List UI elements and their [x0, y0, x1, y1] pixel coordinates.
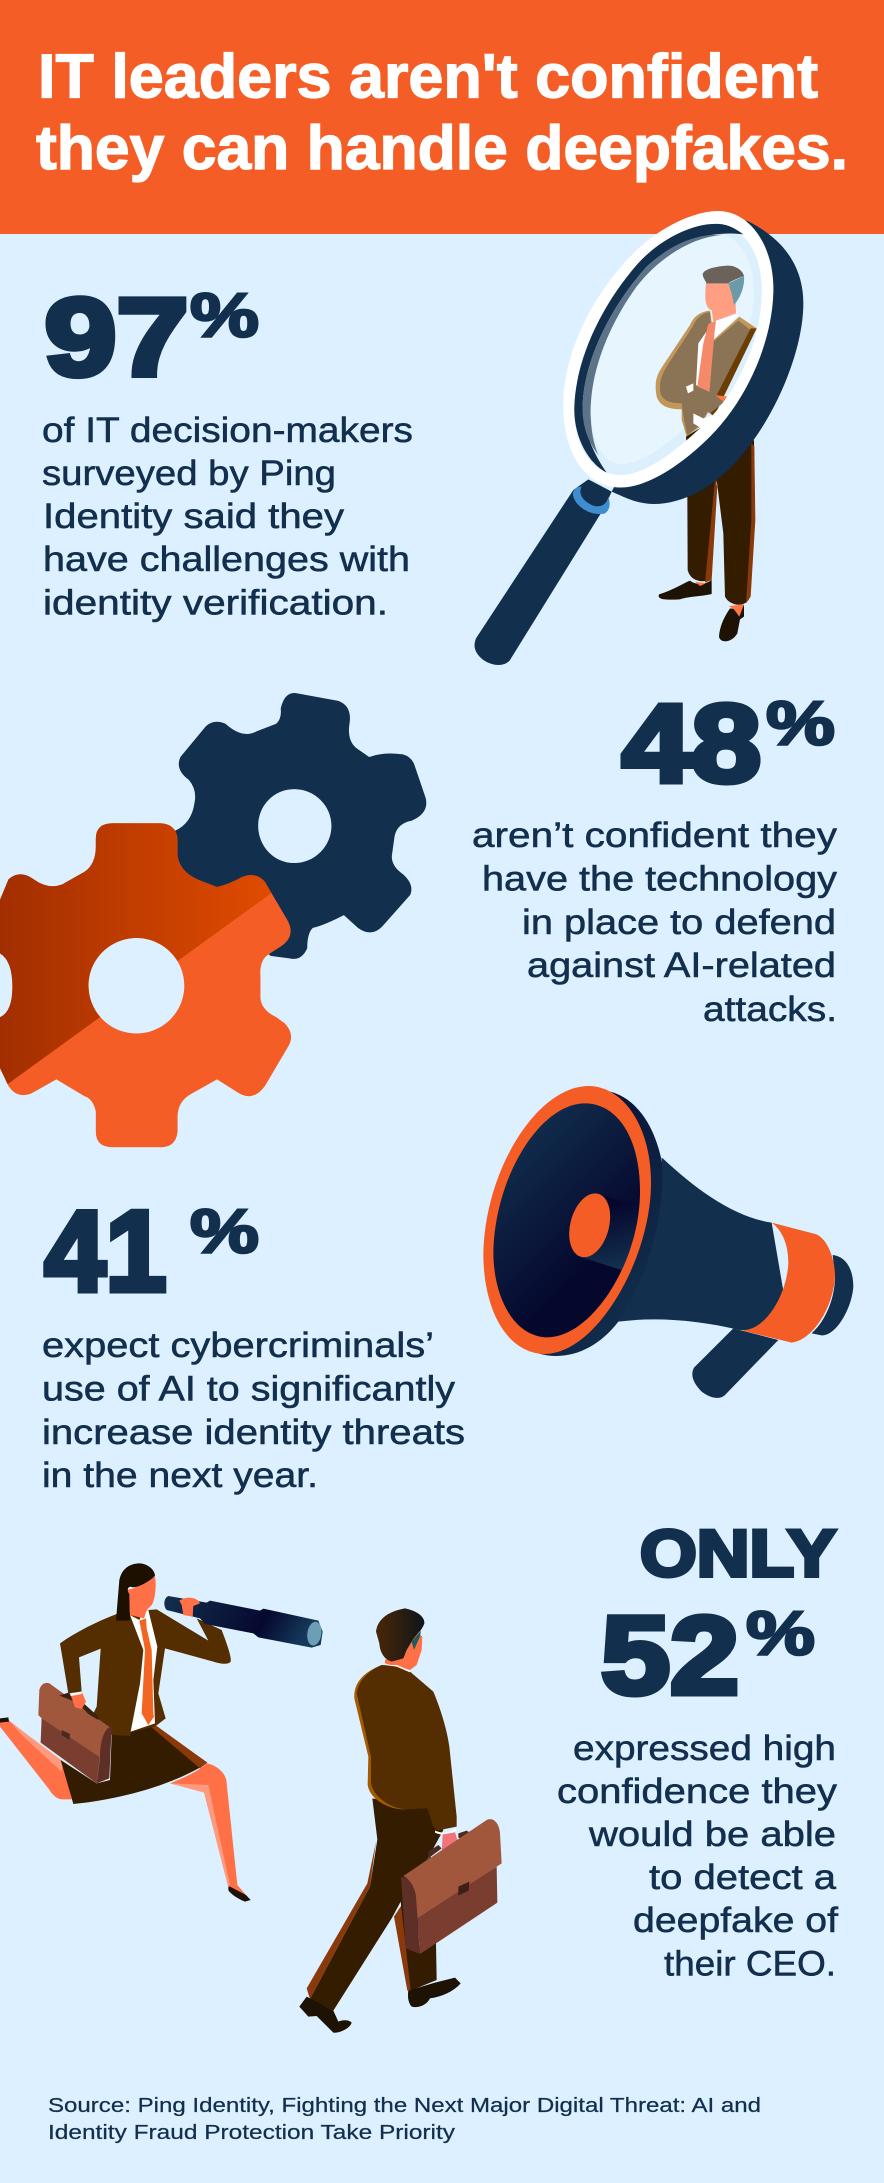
text: 52% description: their CEO. — [664, 1944, 836, 1984]
woman's back leg — [0, 1717, 72, 1799]
title: IT leaders aren't confident — [38, 42, 818, 112]
title: they can handle deepfakes. — [36, 114, 848, 183]
text: 41% description — [42, 1326, 465, 1495]
magnifier handle — [475, 479, 612, 665]
text: 48% description: have the technology — [482, 860, 838, 898]
text: 48% description: attacks. — [703, 990, 837, 1029]
icon: magnifying glass with businessman — [475, 211, 803, 665]
text: 48% description — [472, 816, 838, 1029]
woman's skirt — [61, 1726, 207, 1804]
source note — [48, 2094, 761, 2144]
text: 48% description: aren’t confident they — [472, 816, 838, 855]
text: 97% description: Identity said they — [43, 497, 345, 536]
icon: gears — [0, 693, 426, 1147]
stat: 97% — [42, 276, 413, 622]
text: 97% description: surveyed by Ping — [42, 454, 336, 493]
stat: 48%: 48 — [622, 682, 761, 806]
woman's head — [116, 1563, 156, 1621]
woman's shirt and tie — [130, 1610, 157, 1732]
text: 41% description: increase identity threats — [42, 1413, 465, 1452]
stat: 48% — [472, 682, 838, 1029]
man's briefcase — [401, 1819, 502, 1954]
word: only: ONLY — [640, 1516, 836, 1590]
text: 41% description: use of AI to significantly — [42, 1370, 456, 1408]
source note: Identity Fraud Protection Take Priority — [48, 2121, 456, 2144]
text: 41% description: in the next year. — [42, 1456, 318, 1495]
man's head — [376, 1608, 424, 1670]
megaphone band — [740, 1223, 835, 1343]
stat: 97%: % — [190, 282, 259, 350]
stat: 41%: % — [190, 1198, 259, 1266]
illustration: man walking with briefcase — [299, 1608, 502, 2033]
navy gear — [169, 693, 426, 959]
stat: only 52% — [557, 1516, 838, 1984]
megaphone mouth — [483, 1086, 651, 1354]
text: 52% description: confidence they — [557, 1772, 838, 1811]
stat: 41%: 41 — [44, 1188, 166, 1316]
icon: megaphone — [483, 1086, 853, 1398]
stat: 48%: % — [766, 690, 835, 758]
spyglass — [164, 1596, 323, 1648]
megaphone end cap — [812, 1255, 853, 1335]
text: 52% description: would be able — [588, 1815, 836, 1854]
woman's jacket — [60, 1609, 231, 1736]
man seen through the lens — [656, 266, 757, 445]
illustration: woman with spyglass and briefcase — [0, 1563, 323, 1902]
woman's front leg — [170, 1763, 251, 1902]
megaphone handle — [692, 1328, 778, 1398]
text: 52% description — [557, 1729, 838, 1984]
man's trousers — [307, 1798, 443, 2011]
man's hand and cuff — [435, 1828, 459, 1854]
stat: only 52%: 52 — [601, 1594, 739, 1718]
woman's briefcase — [38, 1683, 112, 1783]
stat: 41% — [42, 1188, 465, 1495]
text: 41% description: expect cybercriminals’ — [42, 1326, 434, 1365]
handle ring — [573, 487, 610, 514]
text: 48% description: in place to defend — [522, 903, 836, 942]
megaphone cone — [618, 1157, 790, 1330]
magnifier rim — [563, 211, 803, 504]
gear shadow — [0, 823, 272, 1084]
orange gear — [0, 823, 291, 1147]
text: 52% description: to detect a — [649, 1858, 837, 1897]
source note: Source: Ping Identity, Fighting the Next Major Digital Threat: AI and — [48, 2094, 761, 2117]
header banner — [0, 0, 884, 234]
stat: 97%: 97 — [44, 276, 188, 399]
text: 97% description: have challenges with — [43, 540, 410, 579]
stat: only 52%: % — [746, 1600, 815, 1668]
text: 97% description: identity verification. — [43, 584, 388, 622]
text: 52% description: deepfake of — [633, 1901, 838, 1940]
title — [36, 42, 848, 183]
text: 48% description: against AI-related — [527, 946, 836, 985]
text: 97% description — [42, 411, 413, 622]
megaphone rim back — [538, 1092, 664, 1356]
text: 97% description: of IT decision-makers — [42, 411, 413, 450]
man's jacket — [354, 1665, 457, 1831]
man's legs and shoes — [659, 440, 755, 641]
text: 52% description: expressed high — [573, 1729, 836, 1768]
man's shoes — [299, 1978, 461, 2033]
